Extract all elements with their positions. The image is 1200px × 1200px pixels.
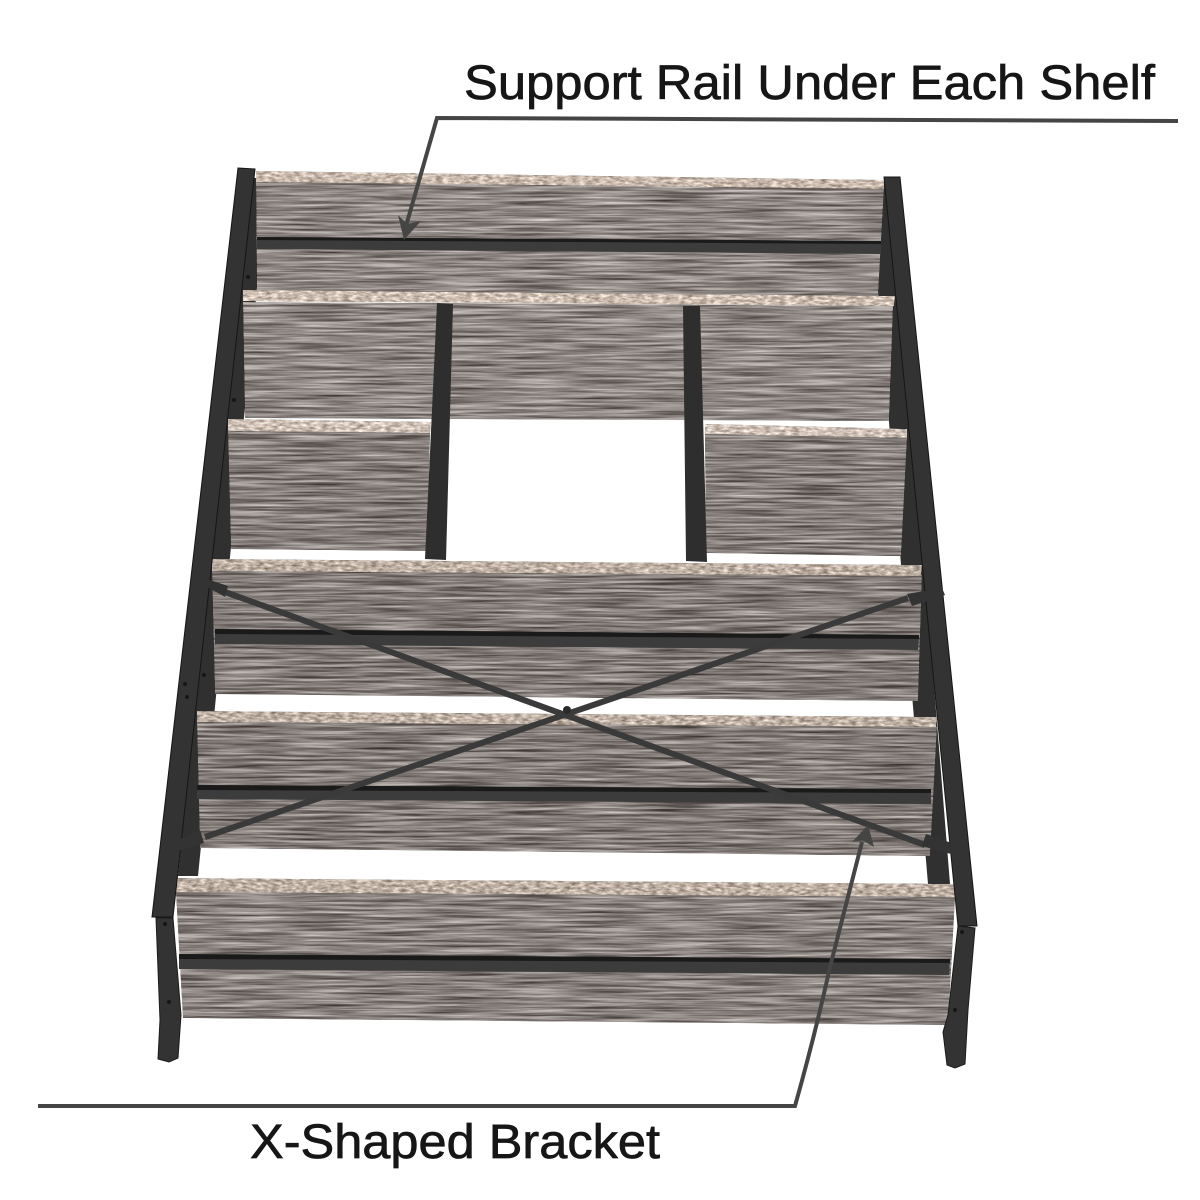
- callout: support rail arrow: [398, 118, 1178, 240]
- callout: X-shaped bracket arrow: [38, 825, 874, 1106]
- right frame post: [884, 177, 977, 926]
- shelf 5: [197, 711, 937, 856]
- shelf 3 left: [228, 419, 431, 551]
- shelf 1: [256, 171, 884, 296]
- central upright left: [425, 303, 453, 560]
- heading: X-shaped bracket label: X-Shaped Bracket: [250, 1116, 660, 1169]
- rear right support strip: [878, 178, 950, 884]
- heading: support rail label: Support Rail Under Each Shelf: [464, 57, 1156, 110]
- shelf 4: [212, 559, 922, 701]
- shelf 6: [176, 878, 955, 1025]
- rear left support strip: [178, 178, 268, 876]
- support rail 4: [179, 954, 950, 975]
- left foot: [156, 918, 181, 1062]
- shelf 3 right: [705, 424, 907, 556]
- right foot: [943, 926, 975, 1068]
- support rail 3: [197, 785, 931, 804]
- X-shaped bracket: [165, 576, 966, 857]
- shelf 2: [243, 290, 895, 421]
- left frame post: [152, 168, 255, 917]
- central upright right: [683, 306, 707, 562]
- support rail 1: [257, 237, 881, 254]
- frame screws: [163, 275, 964, 1012]
- support rail 2: [215, 629, 919, 650]
